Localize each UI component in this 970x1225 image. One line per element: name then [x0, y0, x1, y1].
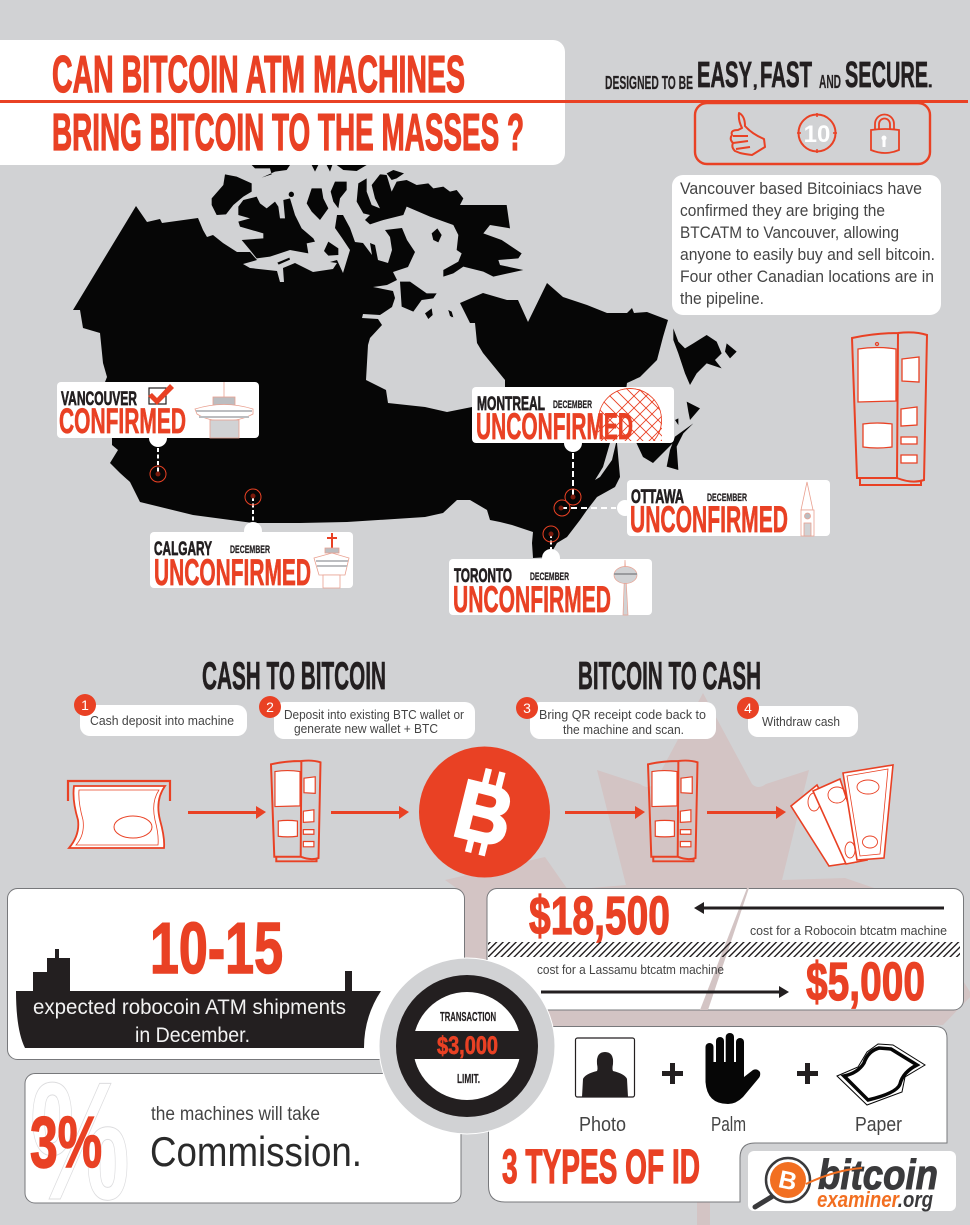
arrow to Robocoin price	[694, 902, 944, 914]
logo: bitcoin examiner	[748, 1151, 956, 1212]
transaction limit badge: TRANSACTION	[440, 1009, 496, 1024]
intro text panel: confirmed they are briging the	[680, 201, 885, 220]
step 1: Cash deposit into machine	[90, 713, 234, 728]
plus sign	[662, 1063, 683, 1084]
commission figure: 3%	[30, 1103, 102, 1183]
intro text panel: Four other Canadian locations are in	[680, 267, 934, 286]
step 2	[259, 696, 475, 739]
shipment caption: in December.	[135, 1024, 250, 1047]
callout: Calgary: DECEMBER	[230, 544, 270, 556]
callout: Montreal: UNCONFIRMED	[476, 406, 633, 447]
arrow to Lassamu price	[541, 986, 789, 998]
icon: magnifier with bitcoin	[755, 1158, 810, 1207]
icon box: easy, fast, secure	[695, 103, 930, 164]
bitcoin symbol: B	[446, 762, 523, 865]
callout: Ottawa: DECEMBER	[707, 492, 747, 504]
icon: cash entering slot	[68, 781, 170, 848]
icon: thumbs up	[731, 113, 765, 155]
step 4: Withdraw cash	[762, 714, 840, 729]
Gaspe	[635, 440, 676, 463]
icon: ten second clock: 10	[804, 121, 830, 148]
heading: cash to bitcoin: CASH TO BITCOIN	[202, 655, 386, 698]
step 3: Bring QR receipt code back to	[539, 707, 706, 722]
callout: Ottawa: OTTAWA	[631, 487, 684, 508]
icon: large ATM machine	[852, 332, 927, 485]
panel: machine cost	[487, 886, 964, 1012]
plus sign	[797, 1063, 818, 1084]
tagline	[605, 54, 932, 95]
icon: cargo ship	[16, 949, 381, 1048]
Robocoin caption: cost for a Robocoin btcatm machine	[750, 924, 947, 938]
step 1: 1	[81, 697, 89, 713]
icon: CN Tower	[614, 560, 637, 615]
panel: shipments	[8, 888, 464, 1060]
title line 1: CAN BITCOIN ATM MACHINES	[52, 46, 465, 104]
panel: types of ID	[488, 1026, 947, 1202]
callout: Ottawa: UNCONFIRMED	[630, 499, 788, 540]
callout: Montreal: DECEMBER	[553, 399, 592, 411]
icon: palm	[706, 1033, 760, 1104]
logo word: examiner.org: examiner.org	[817, 1187, 933, 1212]
icon: Montreal biosphere dome	[598, 388, 662, 441]
callout: Vancouver	[57, 382, 259, 482]
icon: ATM machine step 3	[648, 761, 698, 861]
step 1	[74, 694, 247, 736]
icon: ten second clock	[797, 113, 837, 153]
callout: Calgary: CALGARY	[154, 539, 212, 560]
icon: photo	[576, 1038, 634, 1097]
icon: magnifier with bitcoin: B	[776, 1165, 800, 1197]
callout: Toronto: DECEMBER	[530, 571, 569, 583]
transaction limit badge: $3,000	[437, 1032, 498, 1060]
tagline: EASY	[697, 54, 752, 95]
title line 2: BRING BITCOIN TO THE MASSES ?	[52, 104, 524, 162]
Paper label: Paper	[855, 1114, 902, 1136]
intro text panel: Vancouver based Bitcoiniacs have	[680, 179, 922, 198]
intro text panel: BTCATM to Vancouver, allowing	[680, 223, 899, 242]
logo word: bitcoin: bitcoin	[818, 1151, 938, 1198]
ID heading: 3 TYPES OF ID	[502, 1141, 700, 1194]
Arctic islands	[212, 165, 523, 319]
shipment count: 10-15	[150, 909, 283, 989]
step 2: 2	[266, 699, 274, 715]
panel: commission	[25, 1047, 461, 1225]
maple leaf stripe	[700, 888, 749, 1010]
transaction limit badge: LIMIT.	[457, 1071, 480, 1086]
Palm label: Palm	[711, 1114, 746, 1136]
callout: Vancouver: VANCOUVER	[61, 389, 137, 410]
bitcoin symbol	[419, 746, 550, 878]
Photo label: Photo	[579, 1114, 626, 1136]
arrow 3	[565, 806, 645, 819]
shipment caption	[33, 996, 346, 1047]
title banner	[0, 40, 565, 165]
callout: Toronto: TORONTO	[454, 566, 512, 587]
icon: Peace Tower	[801, 482, 814, 536]
icon: ATM machine step 2	[271, 761, 321, 861]
icon: Calgary tower	[314, 533, 349, 588]
tagline: FAST	[760, 54, 812, 95]
tagline: .	[928, 74, 932, 91]
Lassamu price: $5,000	[806, 952, 925, 1012]
callout: Ottawa	[554, 480, 830, 540]
callout: Calgary: UNCONFIRMED	[154, 552, 311, 593]
heading: bitcoin to cash: BITCOIN TO CASH	[578, 655, 761, 698]
icon: check box	[148, 384, 174, 405]
mainland	[73, 206, 668, 558]
background maple leaf	[445, 693, 970, 1225]
intro text panel: anyone to easily buy and sell bitcoin.	[680, 245, 935, 264]
arrow 2	[331, 806, 409, 819]
transaction limit badge	[379, 958, 555, 1134]
callout: Toronto: UNCONFIRMED	[453, 579, 611, 620]
St Lawrence river gap	[595, 443, 616, 480]
tagline: DESIGNED TO BE	[605, 73, 693, 93]
Atlantic islands	[448, 310, 737, 470]
shipment caption: expected robocoin ATM shipments	[33, 996, 346, 1019]
icon: fan of cash bills	[791, 765, 893, 866]
logo swoosh	[806, 1168, 862, 1184]
step 2: generate new wallet + BTC	[294, 721, 438, 736]
tagline: ,	[753, 74, 757, 91]
arrow 4	[707, 806, 786, 819]
callout: Montreal: MONTREAL	[477, 394, 545, 415]
callout: Vancouver: CONFIRMED	[59, 402, 186, 441]
step 3	[516, 697, 716, 739]
icon: Vancouver harbour tower	[195, 382, 253, 438]
callout: Montreal	[472, 387, 674, 505]
callout: Toronto	[449, 526, 652, 620]
step 2: Deposit into existing BTC wallet or	[284, 707, 465, 722]
callout: Calgary	[150, 489, 353, 593]
step 4: 4	[744, 700, 752, 716]
commission caption: the machines will take	[151, 1104, 320, 1125]
icon: paper bill	[837, 1044, 925, 1105]
arrow 1	[188, 806, 266, 819]
commission word: Commission.	[150, 1128, 362, 1175]
Lassamu caption: cost for a Lassamu btcatm machine	[537, 963, 724, 977]
icon: padlock	[871, 114, 899, 153]
tagline: AND	[819, 72, 841, 92]
intro text panel	[672, 175, 941, 315]
step 3: the machine and scan.	[563, 722, 684, 737]
step 3: 3	[523, 700, 531, 716]
Robocoin price: $18,500	[529, 886, 670, 946]
step 4	[737, 697, 858, 737]
intro text panel: the pipeline.	[680, 289, 764, 308]
map of Canada	[73, 165, 737, 558]
